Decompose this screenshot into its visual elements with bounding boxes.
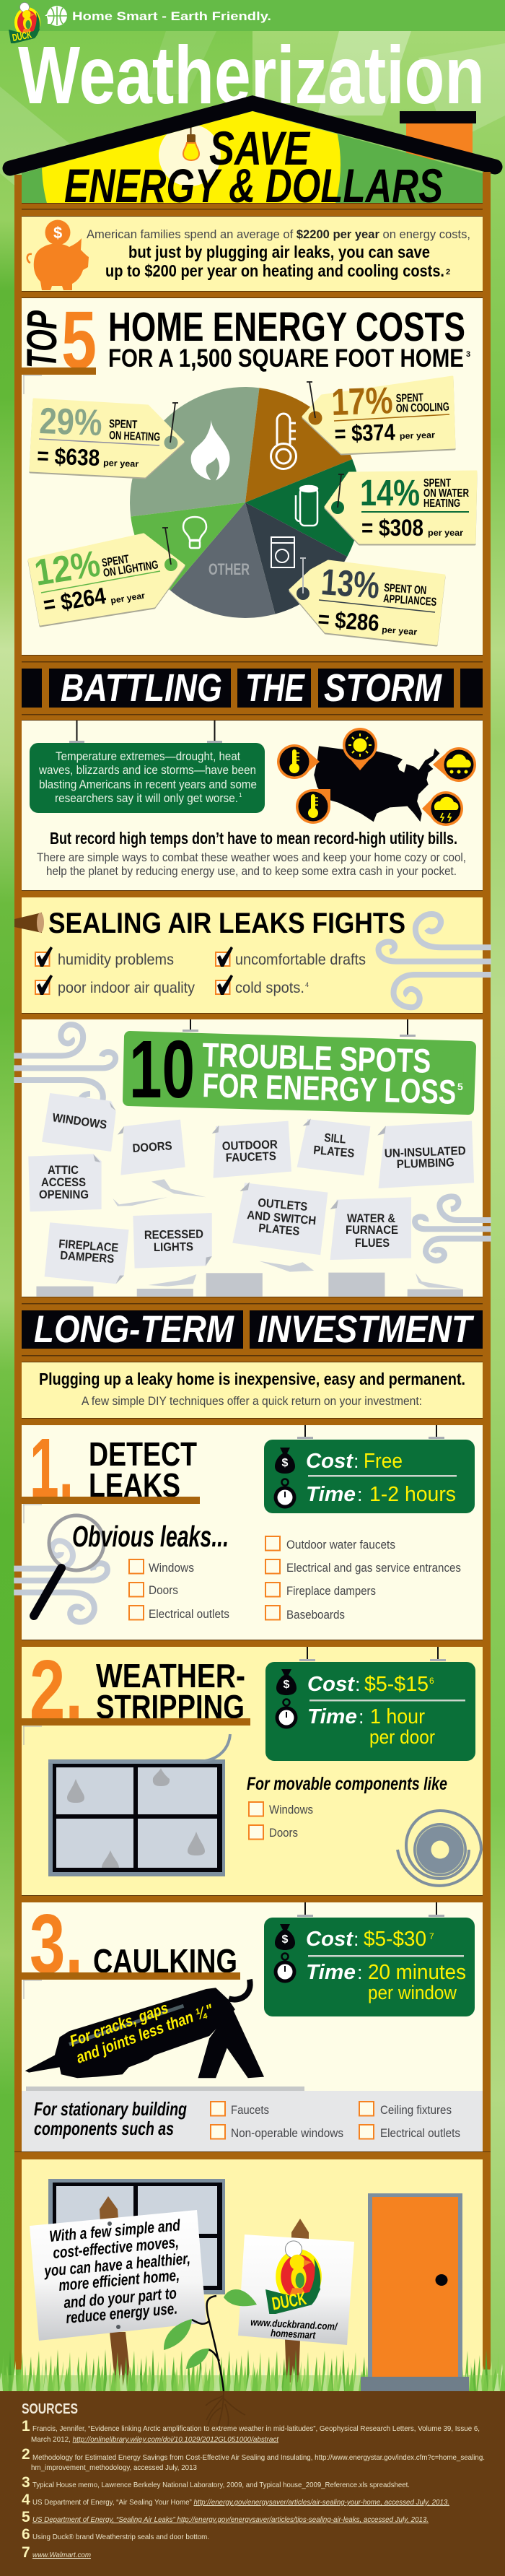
- icon: money bag: [275, 1924, 295, 1950]
- checklist: obvious leaks right: Fireplace dampers: [286, 1584, 376, 1598]
- source 2: hm_improvement_methodology, accessed July, 2013: [31, 2463, 197, 2472]
- number one: 1.: [30, 1421, 74, 1515]
- icon: piggy bank with coin: $: [53, 224, 62, 242]
- note: un-insulated plumbing: [385, 1144, 466, 1171]
- sign: temperature extremes: Temperature extremes—drought, heat: [56, 749, 240, 763]
- icon: money bag: $: [281, 1457, 289, 1469]
- icon: stopwatch: [276, 1700, 297, 1728]
- number three: 3.: [30, 1897, 83, 1990]
- gable with light: [22, 111, 483, 203]
- sign: cost and time: 6: [429, 1676, 434, 1686]
- number two: 2.: [30, 1642, 83, 1736]
- source 4: 4: [22, 2492, 30, 2508]
- checklist item: humidity problems: humidity problems: [58, 952, 174, 968]
- checklist: stationary components: Faucets: [231, 2103, 269, 2117]
- heading: stationary components: components such as: [34, 2118, 174, 2139]
- icon: window: [48, 2179, 225, 2294]
- checklist: movable components: Doors: [269, 1826, 298, 1840]
- checklist item: uncomfortable drafts: uncomfortable drafts: [235, 952, 366, 968]
- tagline: Home Smart - Earth Friendly.: [72, 9, 271, 23]
- sign: cost and time: [264, 1425, 475, 1513]
- note: sill plates: SILL: [324, 1131, 346, 1146]
- sign: closing message: you can have a healthier,: [43, 2249, 191, 2280]
- price tag: 29% heating: ON HEATING: [109, 430, 160, 443]
- sign: temperature extremes: blasting Americans in recent years and some: [39, 778, 257, 791]
- icon: money bag: [275, 1448, 295, 1474]
- heading: weather-stripping: [96, 1657, 245, 1726]
- label: other: OTHER: [208, 560, 250, 578]
- price tag: 12% lighting: = $264: [41, 583, 107, 618]
- checklist: obvious leaks left: Electrical outlets: [149, 1607, 229, 1621]
- price tag: 12% lighting: SPENT: [101, 553, 130, 570]
- banner: battling the storm: BATTLING: [61, 666, 222, 710]
- checklist item: poor indoor air quality: poor indoor air quality: [58, 980, 195, 996]
- checklist item: uncomfortable drafts: [216, 947, 366, 968]
- logo: duck brand large: DUCK: [271, 2288, 308, 2315]
- icon: door: [368, 2193, 462, 2377]
- checklist: obvious leaks left: [129, 1559, 229, 1621]
- icon: log end: [14, 913, 44, 933]
- heading: caulking: CAULKING: [93, 1942, 237, 1980]
- price tag: 13% appliances: APPLIANCES: [383, 593, 437, 609]
- text: simple ways line two: help the planet by reducing energy use, and to keep some extra cash in your pocket.: [46, 864, 457, 878]
- price tag: 12% lighting: [29, 528, 184, 625]
- note: outlets and switch plates: PLATES: [258, 1222, 300, 1238]
- sign: closing message: more efficient home,: [58, 2266, 180, 2294]
- paper notes: [28, 1093, 474, 1297]
- checklist: obvious leaks right: Electrical and gas service entrances: [286, 1561, 461, 1575]
- grass: [0, 2346, 505, 2391]
- icon: magnifying glass: [34, 1515, 104, 1616]
- intro line one: American families spend an average of $2200 per year on energy costs,: [87, 227, 470, 241]
- note: fireplace dampers: FIREPLACE: [58, 1237, 119, 1255]
- checklist: stationary components: Electrical outlets: [380, 2126, 460, 2140]
- source 1: [22, 2418, 480, 2444]
- icon: money bag: [276, 1669, 297, 1695]
- note: attic access opening: ATTIC: [48, 1164, 79, 1177]
- sign: temperature extremes: researchers say it will only get worse.: [55, 791, 238, 805]
- sign: 10 trouble spots: 5: [457, 1081, 463, 1092]
- note: un-insulated plumbing: UN-INSULATED: [385, 1144, 466, 1160]
- sign: 10 trouble spots: 10: [129, 1024, 195, 1115]
- banner: long-term investment: LONG-TERM: [34, 1308, 235, 1351]
- icon: wind gusts right: [415, 1196, 491, 1261]
- panel: step 2 weather-stripping: [22, 1642, 481, 1886]
- price tag: 13% appliances: SPENT ON: [384, 582, 427, 597]
- price tag: 17% cooling: SPENT: [396, 392, 423, 405]
- sign: cost and time: [264, 1902, 475, 2016]
- source 6: [22, 2526, 209, 2543]
- sign: cost and time: per window: [368, 1982, 457, 2003]
- source 1: Francis, Jennifer, “Evidence linking Arctic amplification to extreme weather in mid-latitudes”, Geophysical Research Letters, Volume 39, Issue 6,: [32, 2424, 480, 2433]
- sign: closing message: reduce energy use.: [65, 2299, 178, 2327]
- icon: heat pin west: [277, 744, 320, 779]
- icon: washing machine: [271, 537, 294, 567]
- price tag: 13% appliances: [290, 558, 444, 644]
- sign: closing message: With a few simple and: [48, 2216, 181, 2245]
- heading: detect leaks: DETECT: [89, 1435, 197, 1473]
- note: outlets and switch plates: AND SWITCH: [247, 1209, 317, 1227]
- source 6: Using Duck® brand Weatherstrip seals and door bottom.: [32, 2533, 209, 2541]
- paper wisps: [113, 1179, 462, 1289]
- price tag: 17% cooling: = $374: [334, 419, 395, 447]
- sign: cost and time: Time: [306, 1961, 356, 1984]
- sign: closing message: [30, 2210, 206, 2341]
- source 3: 3: [22, 2474, 30, 2491]
- icon: home and globe: [45, 6, 67, 26]
- heading: sealing air leaks fights: SEALING AIR LEAKS FIGHTS: [48, 908, 405, 939]
- source 2: 2: [22, 2446, 30, 2463]
- price tag: 29% heating: SPENT: [109, 418, 138, 431]
- wooden beams: [14, 203, 491, 2159]
- price tag: 14% water heating: HEATING: [423, 497, 460, 510]
- sign: closing message: cost-effective moves,: [52, 2233, 180, 2262]
- sign: cost and time: Time: [306, 1483, 356, 1506]
- map: united states: [314, 746, 439, 822]
- icon: storm cloud pin: [422, 791, 463, 826]
- sign: cost and time: 1-2 hours: [369, 1483, 456, 1506]
- price tag: 14% water heating: 14%: [360, 472, 420, 513]
- checklist: stationary components: [211, 2102, 460, 2140]
- heading: movable components: For movable components like: [247, 1774, 447, 1794]
- icon: caulk gun: and joints less than ¼": [74, 2001, 216, 2067]
- text: diy techniques: A few simple DIY techniques offer a quick return on your investment:: [82, 1394, 422, 1408]
- heading: weather-stripping: STRIPPING: [96, 1688, 245, 1726]
- source 5: 5: [22, 2509, 30, 2525]
- checklist item: poor indoor air quality: [35, 975, 195, 996]
- icon: caulk gun: For cracks, gaps: [67, 1998, 170, 2050]
- heading: top 5: TOP: [19, 310, 66, 368]
- checklist: obvious leaks left: Windows: [149, 1561, 194, 1575]
- source 1: 1: [22, 2418, 30, 2434]
- sign: 10 trouble spots: [128, 1019, 470, 1115]
- checklist: obvious leaks left: Doors: [149, 1583, 178, 1597]
- price tag: 17% cooling: per year: [400, 430, 435, 441]
- sign: cost and time: $5-$30: [364, 1928, 426, 1951]
- footnote two: 2: [446, 268, 450, 277]
- icon: money bag: $: [283, 1679, 290, 1691]
- source 3: [22, 2474, 410, 2491]
- sign: cost and time: :: [354, 1928, 359, 1950]
- checklist: stationary components: Ceiling fixtures: [380, 2103, 452, 2117]
- price tag: 17% cooling: [303, 377, 454, 453]
- icon: stopwatch: [274, 1954, 296, 1983]
- sign: cost and time: :: [359, 1706, 364, 1728]
- icon: light bulb: [183, 517, 206, 548]
- note: attic access opening: OPENING: [39, 1188, 89, 1201]
- icon: water heater: [296, 486, 317, 526]
- text: simple ways line one: There are simple ways to combat these weather woes and keep your home cozy or cool,: [37, 850, 466, 864]
- note: fireplace dampers: DAMPERS: [60, 1249, 115, 1266]
- panel: sources: [22, 2401, 485, 2561]
- note: sill plates: PLATES: [313, 1144, 355, 1160]
- panel: investment intro: [39, 1370, 465, 1408]
- note: doors: DOORS: [132, 1139, 172, 1155]
- icon: thermometer: [271, 414, 296, 469]
- panel: top 5 home energy costs: [19, 295, 476, 644]
- sign: cost and time: 7: [429, 1931, 434, 1941]
- sign: cost and time: per door: [369, 1726, 435, 1748]
- heading: top 5: [19, 295, 97, 386]
- source 1: March 2012, http://onlinelibrary.wiley.com/doi/10.1029/2012GL051000/abstract: [31, 2435, 279, 2444]
- sign: cost and time: :: [354, 1450, 359, 1472]
- note: sill plates: [313, 1131, 355, 1160]
- price tag: 29% heating: 29%: [39, 400, 103, 443]
- sign: cost and time: 20 minutes: [368, 1961, 466, 1984]
- source 2: [22, 2446, 485, 2472]
- header bar: [0, 0, 505, 31]
- panel: closing yard scene: [30, 2179, 462, 2386]
- banner: battling the storm: THE: [245, 666, 306, 710]
- source 3: Typical House memo, Lawrence Berkeley National Laboratory, 2009, and Typical house_2009_Reference.xls spreadsheet.: [32, 2481, 410, 2489]
- icon: sun pin: [343, 728, 377, 770]
- note: water and furnace flues: FURNACE: [346, 1224, 398, 1237]
- price tag: 13% appliances: per year: [382, 625, 418, 637]
- icon: window with drips: [48, 1734, 230, 1876]
- logo: duck brand large: [265, 2241, 322, 2315]
- sign: closing message: and do your part to: [63, 2284, 177, 2312]
- price tag: 14% water heating: ON WATER: [423, 487, 469, 500]
- icon: snow cloud pin: [433, 747, 476, 782]
- note: recessed lights: [144, 1228, 203, 1254]
- icon: flame: [191, 420, 230, 481]
- icon: plant roots: [206, 2391, 245, 2426]
- price tag: 12% lighting: ON LIGHTING: [102, 559, 159, 580]
- checklist item: cold spots: 4: [305, 981, 309, 988]
- note: outlets and switch plates: [247, 1196, 317, 1238]
- checklist: obvious leaks right: [265, 1536, 461, 1622]
- price tag: 29% heating: = $638: [37, 443, 100, 471]
- heading: stationary components: For stationary building: [34, 2098, 187, 2120]
- plant: [164, 2289, 257, 2391]
- icon: piggy bank with coin: [27, 219, 89, 290]
- price tag: 14% water heating: = $308: [361, 515, 423, 541]
- price tag: 14% water heating: SPENT: [423, 477, 451, 489]
- sign: cost and time: :: [357, 1962, 363, 1983]
- icon: heat pin south: [296, 789, 330, 824]
- source 5: [22, 2509, 429, 2525]
- note: outdoor faucets: OUTDOOR: [222, 1138, 278, 1153]
- heading: top 5: 5: [61, 295, 97, 386]
- sign: cost and time: [265, 1647, 475, 1761]
- sign: temperature extremes: 1: [239, 792, 242, 799]
- sign: cost and time: :: [357, 1484, 363, 1505]
- banner: long-term investment: [22, 1308, 483, 1351]
- price tag: 13% appliances: 13%: [320, 561, 381, 606]
- checklist: obvious leaks right: Baseboards: [286, 1608, 345, 1622]
- note: fireplace dampers: [58, 1237, 119, 1266]
- note: water and furnace flues: FLUES: [355, 1237, 390, 1250]
- source 5: US Department of Energy, “Sealing Air Leaks” http://energy.gov/energysaver/articles/tips-sealing-air-leaks, accessed July, 2013.: [32, 2515, 429, 2524]
- intro line three: up to $200 per year on heating and cooling costs.: [105, 261, 444, 280]
- source 2: Methodology for Estimated Energy Savings from Cost-Effective Air Sealing and Insulating, http://www.energystar.gov/index.cfm?c=home_sealing.: [32, 2453, 485, 2462]
- heading: detect leaks: [89, 1435, 197, 1504]
- checklist item: humidity problems: [35, 947, 174, 968]
- note: outdoor faucets: [222, 1138, 278, 1165]
- panel: 10 trouble spots: [14, 1019, 491, 1297]
- sign: duck brand: homesmart: [271, 2327, 317, 2341]
- icon: wind gusts: [379, 914, 491, 1007]
- price tag: 17% cooling: 17%: [330, 380, 393, 424]
- sign: cost and time: 1 hour: [370, 1705, 425, 1728]
- sign: cost and time: Cost: [306, 1450, 354, 1473]
- checklist item: cold spots: cold spots.: [235, 980, 304, 996]
- note: recessed lights: RECESSED: [144, 1228, 203, 1242]
- note: un-insulated plumbing: PLUMBING: [397, 1156, 454, 1171]
- chimney: [400, 111, 476, 160]
- checklist: stationary components: Non-operable windows: [231, 2126, 343, 2140]
- sign: cost and time: $5-$15: [364, 1673, 429, 1696]
- panel: step 3 caulking: [22, 1897, 475, 2140]
- heading: weather-stripping: WEATHER-: [96, 1657, 245, 1694]
- sign: cost and time: :: [355, 1674, 361, 1695]
- logo: duck brand: [9, 3, 40, 43]
- icon: stopwatch: [274, 1479, 296, 1509]
- paper stacks: [36, 1273, 463, 1297]
- price tag: 12% lighting: 12%: [32, 542, 103, 593]
- source 4: US Department of Energy, “Air Sealing Your Home” http://energy.gov/energysaver/articles/air-sealing-your-home, accessed July, 2013.: [32, 2498, 449, 2507]
- banner: long-term investment: INVESTMENT: [258, 1308, 475, 1351]
- price tag: 13% appliances: = $286: [317, 606, 380, 636]
- heading: sources: SOURCES: [22, 2401, 78, 2417]
- logo: duck brand: DUCK: [12, 29, 32, 43]
- icon: money bag: $: [281, 1933, 289, 1946]
- note: water and furnace flues: [346, 1212, 398, 1250]
- panel: battling the storm: [30, 721, 476, 878]
- price tag: 14% water heating: [325, 471, 476, 543]
- note: outlets and switch plates: OUTLETS: [258, 1196, 308, 1214]
- pie chart: [130, 387, 361, 618]
- note: attic access opening: [39, 1164, 89, 1201]
- price tag: 17% cooling: ON COOLING: [396, 401, 449, 415]
- footnote three: 3: [466, 350, 470, 359]
- banner: battling the storm: [22, 666, 483, 710]
- icon: wind gusts left: [14, 1024, 115, 1110]
- icon: caulk gun: [25, 1980, 264, 2078]
- panel: sealing air leaks: [14, 908, 491, 1007]
- note: attic access opening: ACCESS: [41, 1176, 86, 1189]
- heading: save: SAVE: [209, 121, 311, 175]
- icon: weatherstrip roll: [398, 1811, 481, 1886]
- checklist: movable components: Windows: [269, 1803, 313, 1816]
- sign: temperature extremes: waves, blizzards and ice storms—have been: [38, 763, 256, 777]
- source 7: www.Walmart.com: [32, 2551, 91, 2559]
- note: recessed lights: LIGHTS: [154, 1240, 193, 1254]
- price tag: 29% heating: [30, 399, 183, 477]
- checklist: movable components: [249, 1802, 313, 1840]
- heading: stationary components: [34, 2098, 187, 2139]
- icon: wind gusts behind magnifier: [14, 1541, 107, 1622]
- soil: [0, 2391, 505, 2576]
- source 7: [22, 2544, 91, 2561]
- price tag: 29% heating: per year: [103, 458, 139, 469]
- roof: [10, 103, 495, 168]
- heading: obvious leaks: Obvious leaks...: [72, 1520, 229, 1553]
- sign: temperature extremes: [30, 721, 265, 813]
- banner: battling the storm: STORM: [324, 666, 442, 710]
- icon: hanging bulb: [183, 127, 199, 160]
- source 7: 7: [22, 2544, 30, 2561]
- sign: cost and time: Time: [307, 1705, 357, 1728]
- note: water and furnace flues: WATER &: [347, 1212, 395, 1225]
- source 6: 6: [22, 2526, 30, 2543]
- heading: detect leaks: LEAKS: [89, 1466, 180, 1504]
- sign: 10 trouble spots: TROUBLE SPOTS: [202, 1035, 431, 1080]
- door and step: [361, 2195, 469, 2391]
- note: outdoor faucets: FAUCETS: [226, 1150, 276, 1165]
- intro line two: but just by plugging air leaks, you can save: [128, 243, 430, 261]
- checklist: obvious leaks right: Outdoor water faucets: [286, 1538, 395, 1552]
- sign: cost and time: Cost: [307, 1673, 355, 1696]
- sign: duck brand: [238, 2235, 354, 2345]
- price tag: 14% water heating: per year: [428, 528, 463, 538]
- sign posts: [100, 2196, 309, 2386]
- source 4: [22, 2492, 449, 2508]
- price tag: 12% lighting: per year: [110, 591, 146, 606]
- note: windows: WINDOWS: [51, 1111, 107, 1132]
- checklist item: cold spots: [216, 975, 309, 996]
- panel: step 1 detect leaks: [14, 1421, 475, 1622]
- panel: intro savings: [27, 219, 470, 290]
- sign: cost and time: Free: [364, 1450, 403, 1473]
- sign: cost and time: Cost: [306, 1928, 354, 1951]
- sign: duck brand: www.duckbrand.com/: [250, 2316, 338, 2332]
